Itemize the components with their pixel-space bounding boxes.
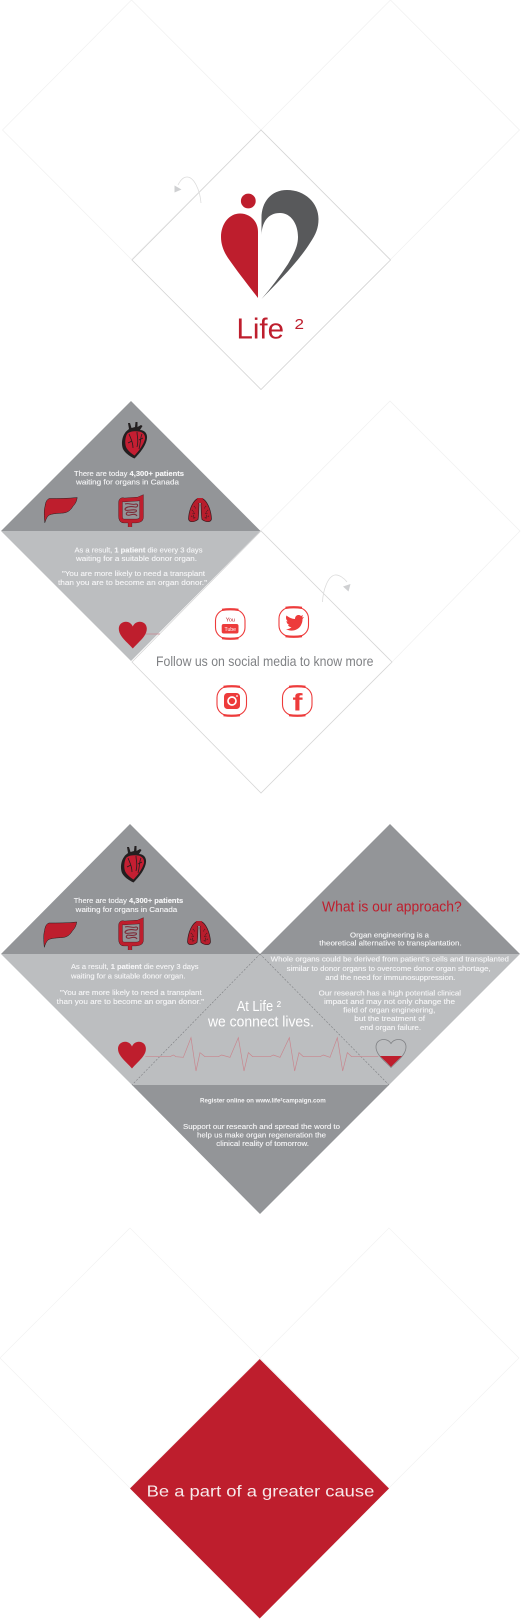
- result and quote text: As a result, 1 patient die every 3 days: [74, 546, 203, 554]
- panel: patient statistics section: [1, 401, 520, 793]
- approach intro: Organ engineering is a: [350, 930, 430, 939]
- heart with pulse stub: [119, 622, 160, 648]
- red diamond: [130, 1359, 389, 1618]
- icon: intestine: [120, 920, 142, 950]
- faint upper left diamond: [2, 0, 261, 260]
- approach heading: What is our approach?: [322, 899, 462, 916]
- approach details: similar to donor organs to overcome donor organ shortage,: [287, 964, 491, 973]
- logo wordmark: 2: [294, 316, 304, 333]
- result and quote text: waiting for a suitable donor organ.: [70, 971, 186, 980]
- logo: heart of two figures: [221, 190, 318, 299]
- dark left triangle: [1, 824, 260, 954]
- approach details: [271, 955, 509, 1032]
- dark triangle: [1, 401, 260, 531]
- empty heart: [376, 1040, 406, 1068]
- result and quote text: "You are more likely to need a transplant: [62, 569, 206, 578]
- icon: facebook: [282, 686, 312, 716]
- waiting list text: There are today 4,300+ patients: [74, 896, 183, 905]
- icon: youtube: [216, 609, 245, 639]
- panel: approach section: [1, 824, 520, 1214]
- approach intro: [319, 930, 462, 947]
- heartbeat line: [145, 1038, 378, 1071]
- faint upper right diamond: [261, 0, 520, 260]
- faint upper right diamond: [260, 401, 520, 662]
- icon: anatomical heart: [122, 422, 147, 458]
- icon: facebook: f: [292, 690, 304, 716]
- connect lives text: [207, 999, 314, 1031]
- register text: Register online on www.life²campaign.com: [200, 1098, 326, 1105]
- approach details: end organ failure.: [360, 1023, 421, 1032]
- approach details: impact and may not only change the: [324, 997, 455, 1006]
- fold arrow: [174, 177, 201, 203]
- dark bottom triangle: [132, 1085, 389, 1214]
- result and quote text: waiting for a suitable donor organ.: [75, 554, 197, 563]
- result and quote text: [58, 546, 207, 587]
- waiting list text: [74, 469, 184, 486]
- icon: intestine: [120, 498, 142, 527]
- waiting list text: waiting for organs in Canada: [75, 478, 180, 486]
- follow text: Follow us on social media to know more: [156, 654, 374, 669]
- approach intro: theoretical alternative to transplantation.: [319, 938, 462, 947]
- result and quote text: than you are to become an organ donor.": [57, 997, 204, 1006]
- dashed fold lines: [132, 954, 389, 1085]
- social media diamond: [132, 531, 392, 793]
- icon: lungs: [188, 921, 210, 945]
- waiting list text: There are today 4,300+ patients: [74, 469, 184, 478]
- approach details: Whole organs could be derived from patient's cells and transplanted: [271, 955, 509, 964]
- call to action: Be a part of a greater cause: [147, 1484, 374, 1501]
- logo wordmark: [236, 314, 304, 346]
- waiting list text: [74, 896, 183, 914]
- icon: youtube: Tube: [224, 627, 236, 633]
- result and quote text: than you are to become an organ donor.": [58, 578, 207, 587]
- icon: liver: [44, 922, 77, 947]
- logo wordmark: Life: [236, 314, 284, 346]
- approach details: field of organ engineering,: [343, 1006, 435, 1015]
- waiting list text: waiting for organs in Canada: [75, 905, 178, 914]
- light triangle: [1, 531, 260, 661]
- support text: clinical reality of tomorrow.: [216, 1139, 309, 1148]
- cover diamond: [132, 130, 390, 390]
- result and quote text: As a result, 1 patient die every 3 days: [71, 962, 199, 971]
- icon: liver: [44, 498, 77, 523]
- connect lives text: At Life ²: [237, 999, 281, 1015]
- icon: anatomical heart: [121, 846, 146, 882]
- fold arrow: [322, 575, 350, 602]
- icon: youtube: You: [226, 617, 235, 623]
- faint right diamond: [260, 1228, 519, 1488]
- approach details: but the treatment of: [354, 1014, 426, 1023]
- approach details: and the need for immunosuppression.: [325, 973, 455, 982]
- full heart: [118, 1042, 146, 1068]
- icon: instagram: [217, 686, 246, 716]
- approach details: Our research has a high potential clinical: [319, 989, 461, 998]
- dark right triangle: [260, 824, 520, 954]
- icon: twitter: [279, 607, 308, 637]
- support text: help us make organ regeneration the: [197, 1131, 326, 1140]
- result and quote text: [57, 962, 204, 1006]
- result and quote text: "You are more likely to need a transplant: [60, 988, 203, 997]
- faint left diamond: [0, 1228, 260, 1488]
- panel: closing section: [0, 1228, 519, 1618]
- support text: Support our research and spread the word to: [183, 1122, 340, 1131]
- connect lives text: we connect lives.: [207, 1015, 314, 1031]
- support text: [183, 1122, 340, 1148]
- light centre band: [1, 954, 520, 1085]
- icon: lungs: [188, 498, 212, 522]
- panel: cover section: [2, 0, 520, 390]
